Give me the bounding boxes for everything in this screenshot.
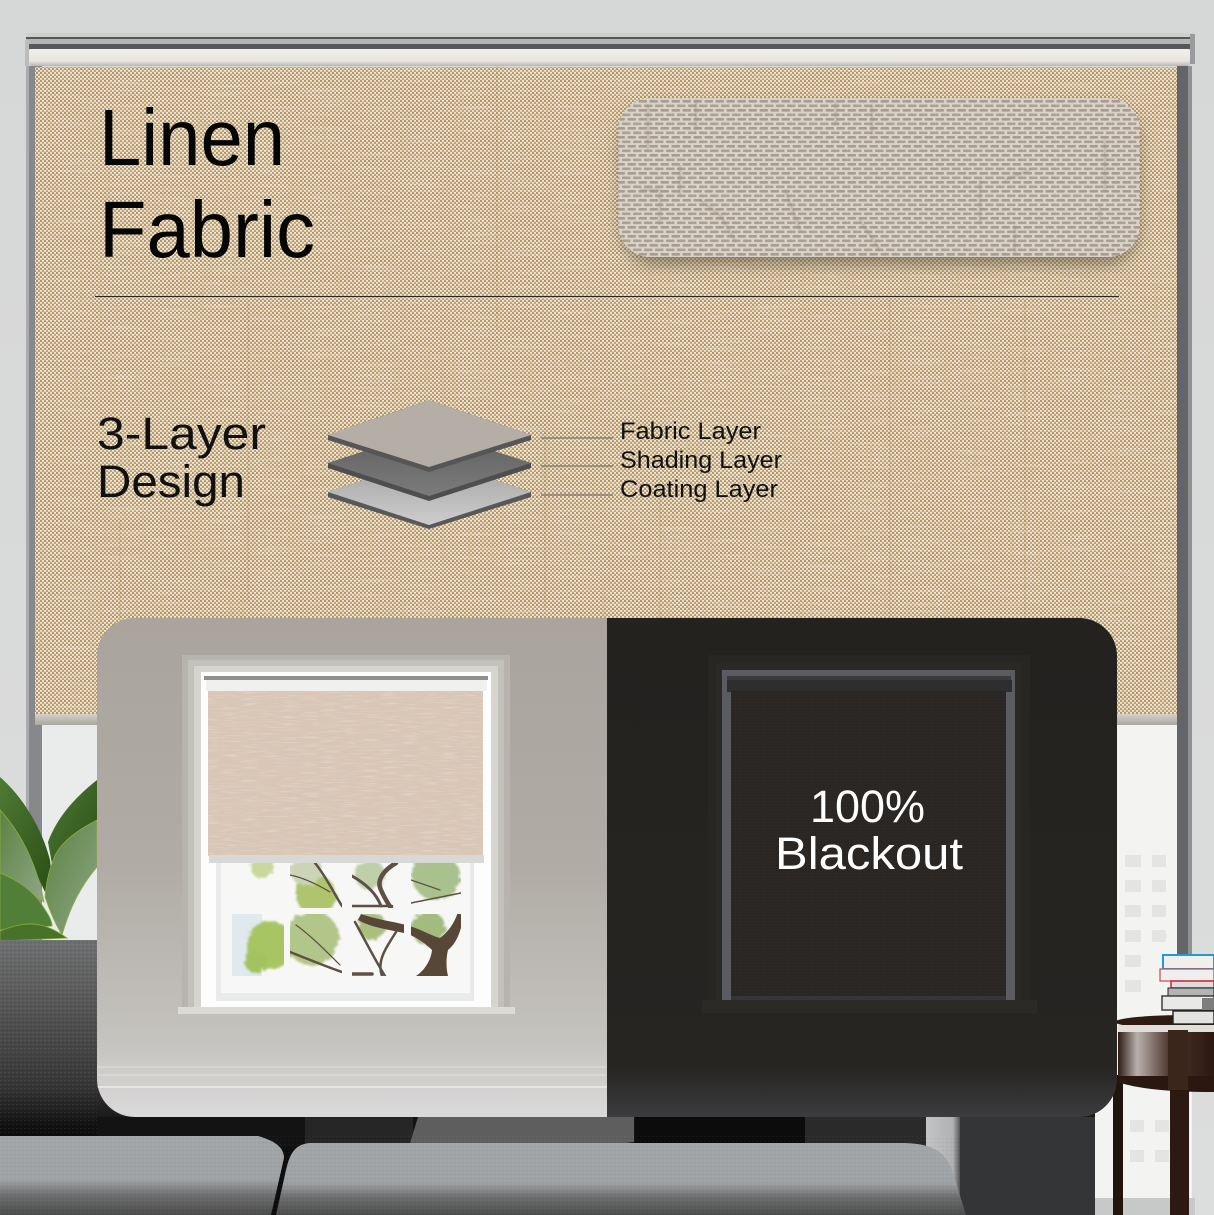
leaf: right light <box>45 820 97 935</box>
left half: daylight room <box>97 618 608 1117</box>
leaf: right dark <box>48 780 97 864</box>
headrail and roller <box>25 33 1195 66</box>
divider line <box>95 296 1119 297</box>
stack of books <box>1160 955 1214 1024</box>
window behind the roller shade <box>42 720 1195 1215</box>
linen fabric roller shade <box>35 60 1177 725</box>
blackout label: Blackout <box>775 828 964 879</box>
fabric swatch <box>618 98 1140 264</box>
layer labels: Fabric Layer <box>620 418 761 445</box>
seat cushion left <box>0 1136 284 1215</box>
blind headrail <box>204 676 488 680</box>
tree trunk and branches <box>358 912 463 976</box>
faint distant buildings <box>1125 855 1169 1162</box>
title: Linen Fabric: Linen <box>99 93 285 182</box>
dark sill <box>702 1000 1037 1013</box>
leaf: bottom <box>0 924 67 941</box>
layer labels: Coating Layer <box>620 476 778 503</box>
side table <box>1113 1015 1214 1215</box>
layer labels: Shading Layer <box>620 447 782 474</box>
window trim <box>182 655 510 1007</box>
layered material diagram <box>328 400 531 529</box>
comparison panel <box>97 618 1117 1117</box>
title: Linen Fabric: Fabric <box>99 185 315 274</box>
dark window trim <box>708 655 1030 1000</box>
dark window opening <box>722 670 1015 1000</box>
layer labels <box>620 418 782 503</box>
layer leader lines <box>541 438 613 495</box>
plant <box>0 777 97 941</box>
blackout label <box>775 781 964 879</box>
leaf: lower left <box>0 873 52 930</box>
leaf: left mid <box>0 810 44 902</box>
fabric thread texture <box>35 67 1177 717</box>
coating layer <box>328 459 531 529</box>
seat cushion center <box>276 1143 966 1215</box>
heading: 3-Layer Design: Design <box>97 456 245 507</box>
window sill <box>178 1007 515 1014</box>
fabric layer <box>328 400 531 472</box>
window frame sides <box>26 66 1192 956</box>
outside window frame <box>216 863 474 1001</box>
shading layer <box>328 430 531 501</box>
right half: blackout room <box>607 618 1117 1117</box>
heading: 3-Layer Design <box>97 408 266 507</box>
title: Linen Fabric <box>99 93 315 274</box>
heading: 3-Layer Design: 3-Layer <box>97 408 266 459</box>
sofa back <box>0 940 1095 1215</box>
right arm <box>926 1117 962 1215</box>
blackout label: 100% <box>810 781 925 832</box>
dark blind fabric <box>731 691 1006 1000</box>
window opening <box>201 672 491 1007</box>
leaf: tall back left <box>0 777 51 892</box>
hem bar <box>35 714 1177 725</box>
blind fabric <box>208 691 483 856</box>
view through panes <box>232 852 463 976</box>
throw pillow <box>410 1117 634 1146</box>
dark blind headrail <box>727 680 1012 692</box>
blind hem bar <box>209 855 484 863</box>
sofa <box>0 940 1095 1215</box>
fabric slub lines <box>120 60 1025 715</box>
